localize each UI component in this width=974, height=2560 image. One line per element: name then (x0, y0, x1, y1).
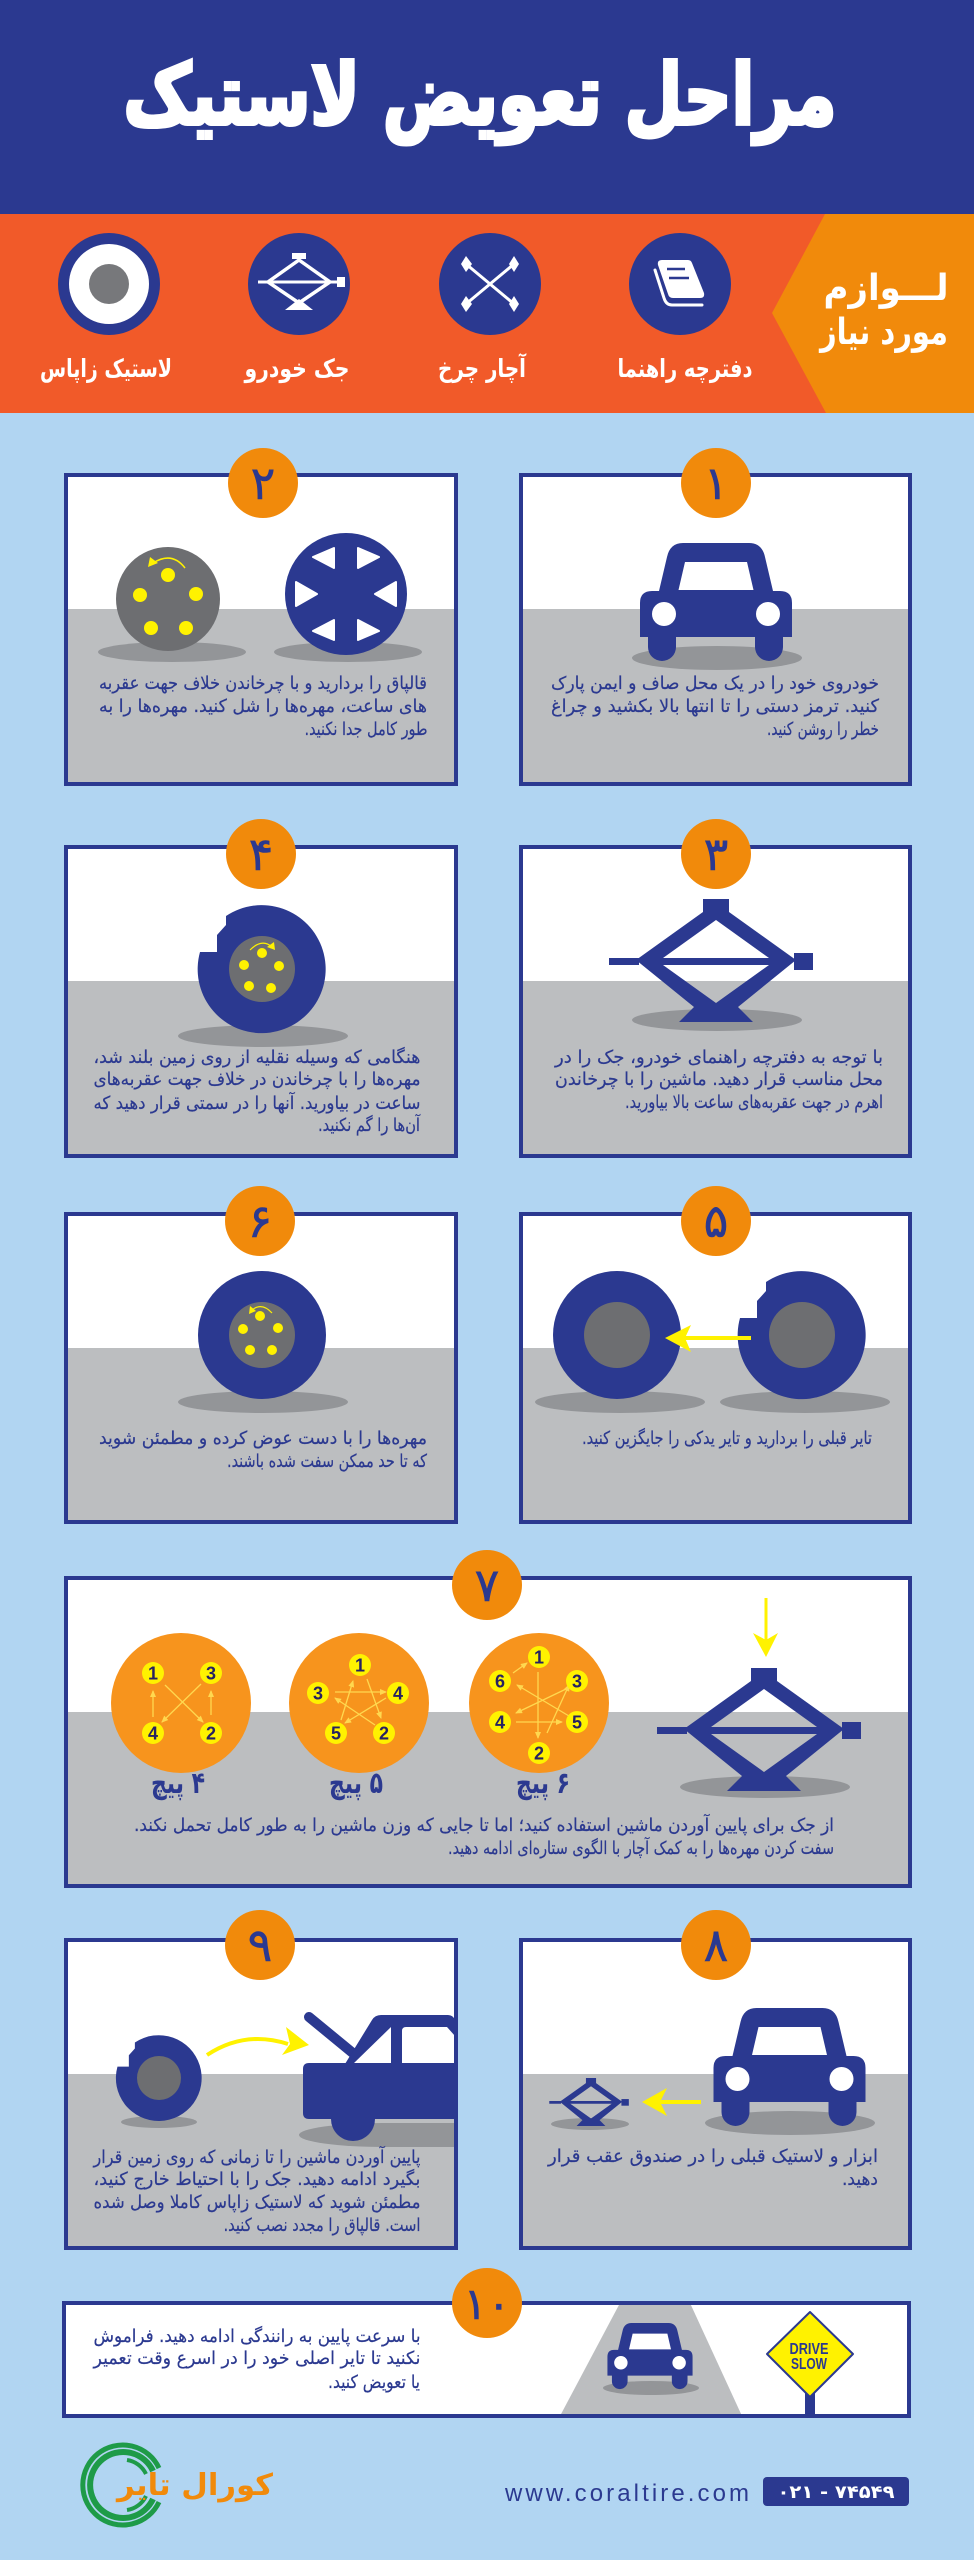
phone box (763, 2477, 909, 2506)
badge 2 (228, 448, 298, 518)
badge 4 (226, 819, 296, 889)
diagram: 5 bolt pattern: 4 (393, 1684, 403, 1704)
icon: old wheel (720, 1271, 890, 1413)
label: spare tire: لاستیک زاپاس (40, 354, 172, 383)
badge 10 (452, 2268, 522, 2338)
badge 3 (681, 819, 751, 889)
text: step 9: بگیرد ادامه دهید. جک را با احتیاط خارج کنید، (94, 2168, 420, 2190)
icon: jacked wheel (178, 905, 348, 1047)
diagram: 5 bolt pattern: 1 (355, 1656, 365, 1676)
icon: removed wheel (116, 2035, 202, 2128)
icon: spare tire (58, 233, 160, 335)
text: step 4: آن‌ها را گم نکنید. (318, 1113, 421, 1136)
badge 9 (225, 1910, 295, 1980)
icon: small jack (549, 2078, 629, 2130)
icon: car front (705, 2008, 875, 2135)
panel: step 5 (519, 1186, 912, 1524)
badge 1: ۱ (704, 456, 728, 510)
panel: step 3 (519, 819, 912, 1158)
panel: step 9 (64, 1910, 458, 2250)
text: step 2: قالپاق را بردارید و با چرخاندن خلاف جهت عقربه (99, 673, 427, 694)
arrow: swap wheel (665, 1325, 751, 1352)
diagram: 6 bolt pattern: 5 (572, 1712, 582, 1732)
text: step 8 (547, 2146, 878, 2190)
panel: step 2 (64, 448, 458, 786)
icon: wheel tightened (178, 1271, 348, 1413)
text: step 1 (551, 673, 879, 740)
text: step 3 (554, 1047, 883, 1113)
diagram: 6 bolt pattern: 3 (572, 1672, 582, 1692)
label: 6 bolts: ۶ پیچ (516, 1766, 570, 1801)
text: step 10 (93, 2325, 420, 2393)
badge 6: ۶ (248, 1194, 272, 1248)
text: step 1: خطر را روشن کنید. (767, 719, 879, 740)
phone box: ۰۲۱ - ۷۴۵۴۹ (778, 2482, 895, 2503)
text: step 2 (99, 673, 428, 740)
text: step 9: مطمئن شوید که لاستیک زاپاس کاملا وصل شده (94, 2192, 420, 2213)
label: 4 bolts: ۴ پیچ (151, 1766, 205, 1801)
badge 4: ۴ (249, 827, 273, 881)
label: 5 bolts: ۵ پیچ (329, 1766, 383, 1801)
diagram: 4 bolt pattern: 4 (148, 1724, 158, 1744)
tag: required tools: لـــوازم (824, 268, 948, 309)
diagram: 5 bolt pattern: 2 (379, 1724, 389, 1744)
panel: step 8 (519, 1910, 912, 2250)
tag: required tools (772, 214, 974, 413)
diagram: 6 bolt pattern: 4 (495, 1712, 505, 1732)
diagram: 4 bolt pattern: 2 (206, 1724, 216, 1744)
text: step 9: است. قالپاق را مجدد نصب کنید. (224, 2215, 420, 2236)
icon: wheel with bolts (98, 547, 246, 662)
icon: car front (632, 543, 802, 670)
icon: car trunk open (299, 2015, 455, 2147)
arrow: to trunk (642, 2088, 701, 2116)
icon: lowering jack (657, 1668, 861, 1798)
panel: step 1 (519, 448, 912, 786)
panel: step 10 (62, 2268, 911, 2418)
text: step 6: مهره‌ها را با دست عوض کرده و مطمئن شوید (99, 1428, 427, 1449)
text: step 7: از جک برای پایین آوردن ماشین استفاده کنید؛ اما تا جایی که وزن ماشین را به طور کامل تحمل نکند. (134, 1813, 834, 1836)
panel: step 7 (64, 1550, 912, 1888)
diagram: 4 bolt pattern: 3 (206, 1664, 216, 1684)
label: car jack: جک خودرو (243, 354, 350, 384)
diagram: 5 bolt pattern (289, 1633, 429, 1773)
icon: wheel wrench (439, 233, 541, 335)
header banner (0, 0, 974, 214)
panel: required tools band (0, 214, 974, 413)
badge 5 (681, 1186, 751, 1256)
diagram: 4 bolt pattern (111, 1633, 251, 1773)
icon: drive slow sign: SLOW (791, 2356, 828, 2373)
diagram: 6 bolt pattern: 6 (495, 1672, 505, 1692)
arrow: wheel into trunk (207, 2027, 309, 2055)
text: step 8: دهید. (842, 2169, 878, 2190)
text: step 3: با توجه به دفترچه راهنمای خودرو، جک را در (554, 1047, 883, 1068)
text: step 8: ابزار و لاستیک قبلی را در صندوق عقب قرار (547, 2146, 878, 2167)
text: step 4 (94, 1046, 421, 1136)
text: step 7 (134, 1813, 834, 1859)
diagram: 4 bolt pattern: 1 (148, 1664, 158, 1684)
text: step 1: خودروی خود را در یک محل صاف و ایمن پارک (551, 673, 879, 694)
text: step 1: کنید. ترمز دستی را تا انتها بالا بکشید و چراغ (551, 696, 879, 717)
text: step 9: پایین آوردن ماشین را تا زمانی که روی زمین قرار (93, 2145, 420, 2168)
panel: step 4 (64, 819, 458, 1158)
text: step 2: های ساعت، مهره‌ها را شل کنید. مهره‌ها را به (99, 696, 427, 717)
label: manual book: دفترچه راهنما (618, 354, 753, 384)
icon: jack (609, 899, 813, 1031)
text: step 3: محل مناسب قرار دهید. ماشین را با چرخاندن (555, 1069, 883, 1090)
badge 3: ۳ (704, 827, 728, 881)
icon: car on road (603, 2323, 699, 2395)
diagram: 5 bolt pattern: 5 (331, 1724, 341, 1744)
text: step 4: مهره‌ها را با چرخاندن در خلاف جهت عقربه‌های (94, 1069, 420, 1090)
text: step 5: تایر قبلی را بردارید و تایر یدکی را جایگزین کنید. (582, 1427, 872, 1449)
badge 8: ۸ (704, 1918, 728, 1972)
text: step 7: سفت کردن مهره‌ها را به کمک آچار با الگوی ستاره‌ای ادامه دهید. (448, 1836, 834, 1859)
icon: car jack (248, 233, 350, 335)
text: step 9 (93, 2145, 420, 2236)
diagram: 5 bolt pattern: 3 (313, 1684, 323, 1704)
icon: road (560, 2303, 742, 2416)
text: step 4: هنگامی که وسیله نقلیه از روی زمین بلند شد، (94, 1046, 420, 1068)
text: step 4: ساعت در بیاورید. آنها را در سمتی قرار دهید که (94, 1091, 420, 1114)
badge 1 (681, 448, 751, 518)
text: step 6 (99, 1428, 427, 1472)
icon: new wheel (535, 1271, 705, 1413)
icon: hubcap (274, 533, 422, 662)
text: step 6: که تا حد ممکن سفت شده باشند. (227, 1451, 427, 1472)
logo: coral tire (83, 2445, 274, 2525)
text: step 3: اهرم در جهت عقربه‌های ساعت بالا بیاورید. (625, 1092, 883, 1113)
badge 5: ۵ (704, 1194, 728, 1248)
text: step 2: طور کامل جدا نکنید. (304, 719, 428, 740)
diagram: 6 bolt pattern: 1 (534, 1648, 544, 1668)
badge 9: ۹ (248, 1918, 272, 1972)
website url: www.coraltire.com (504, 2480, 749, 2507)
badge 2: ۲ (251, 456, 275, 510)
badge 8 (681, 1910, 751, 1980)
icon: drive slow sign: DRIVE (790, 2341, 829, 2358)
badge 10: ۱۰ (463, 2279, 511, 2330)
icon: drive slow sign (767, 2312, 853, 2416)
arrow: jack down (753, 1598, 778, 1657)
label: wheel wrench: آچار چرخ (438, 353, 527, 384)
text: step 10: نکنید تا تایر اصلی خود را در اسرع وقت تعمیر (93, 2348, 420, 2369)
diagram: 6 bolt pattern: 2 (534, 1744, 544, 1764)
panel: step 6 (64, 1186, 458, 1524)
logo: coral tire: کورال تایر (115, 2468, 274, 2503)
badge 7: ۷ (475, 1558, 499, 1612)
text: step 10: با سرعت پایین به رانندگی ادامه دهید. فراموش (94, 2325, 420, 2347)
diagram: 6 bolt pattern (469, 1633, 609, 1773)
badge 7 (452, 1550, 522, 1620)
text: step 10: یا تعویض کنید. (328, 2372, 420, 2393)
badge 6 (225, 1186, 295, 1256)
icon: manual book (629, 233, 731, 335)
